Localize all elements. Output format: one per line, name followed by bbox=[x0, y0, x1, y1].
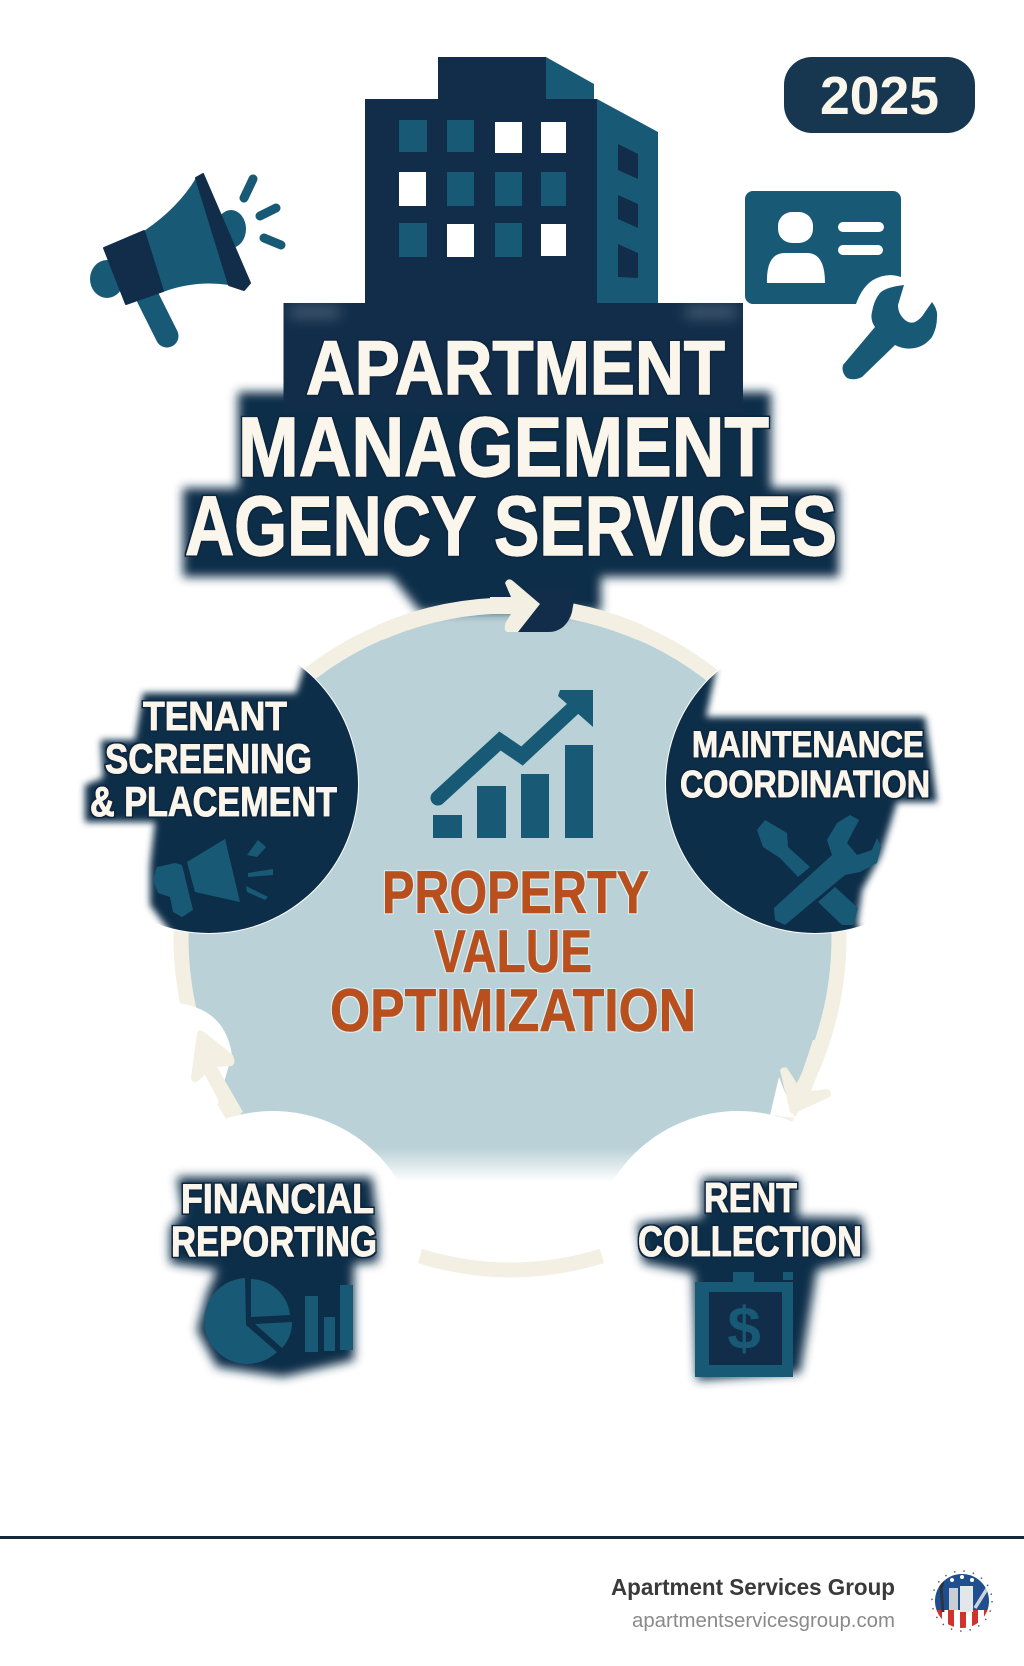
footer: company name: Apartment Services Group bbox=[611, 1574, 895, 1600]
icon: crossed tools bbox=[757, 815, 881, 925]
white blob behind left arrow bbox=[176, 1003, 232, 1120]
panel: financial reporting bbox=[126, 1111, 420, 1405]
financial label: REPORTING bbox=[171, 1218, 377, 1266]
icon: megaphone bbox=[90, 174, 281, 336]
icon: ID card with wrench bbox=[745, 191, 937, 379]
cycle ring bbox=[181, 606, 839, 1268]
rent label: COLLECTION bbox=[638, 1218, 862, 1266]
badge: year 2025: 2025 bbox=[820, 66, 939, 126]
chart: rising bars and arrow bbox=[433, 690, 593, 838]
footer divider bbox=[0, 1536, 1024, 1539]
icon: clipboard with dollar bbox=[695, 1272, 793, 1377]
financial label bbox=[171, 1175, 377, 1266]
panel: title banner bbox=[183, 303, 839, 612]
tenant label: & PLACEMENT bbox=[90, 778, 337, 825]
cycle ring: bottom segment bbox=[420, 1256, 602, 1270]
arrow: top of cycle bbox=[490, 579, 540, 632]
maintenance label: MAINTENANCE bbox=[692, 724, 924, 765]
financial label: FINANCIAL bbox=[181, 1175, 374, 1222]
panel: central value circle bbox=[181, 606, 839, 1268]
tenant label: SCREENING bbox=[105, 735, 312, 782]
title text: MANAGEMENT bbox=[238, 400, 769, 494]
heading: property value optimization bbox=[330, 859, 696, 1044]
heading: property value optimization: VALUE bbox=[434, 918, 592, 985]
tenant label: TENANT bbox=[143, 693, 287, 739]
icon: clipboard with dollar: $ bbox=[727, 1295, 761, 1362]
panel: maintenance coordination bbox=[665, 670, 942, 934]
heading: property value optimization: PROPERTY bbox=[382, 859, 649, 926]
icon: apartment building bbox=[365, 57, 658, 309]
title text bbox=[185, 326, 837, 573]
tenant label bbox=[90, 693, 337, 825]
arrow: left side of cycle bbox=[191, 1030, 243, 1120]
badge: year 2025 bbox=[784, 57, 975, 133]
panel: tenant screening and placement bbox=[79, 665, 359, 934]
icon: company logo bbox=[930, 1570, 994, 1634]
title text: APARTMENT bbox=[306, 326, 725, 411]
rent label: RENT bbox=[704, 1174, 797, 1221]
maintenance label bbox=[680, 724, 930, 806]
white fade at base of circle bbox=[340, 1148, 690, 1291]
rent label bbox=[638, 1174, 862, 1266]
title text: AGENCY SERVICES bbox=[185, 479, 837, 573]
wedge behind right arrow bbox=[770, 1077, 795, 1118]
icon: pie chart and bars bbox=[204, 1278, 353, 1364]
arrow: right side of cycle bbox=[780, 1040, 831, 1114]
icon: small megaphone bbox=[153, 839, 273, 917]
heading: property value optimization: OPTIMIZATION bbox=[330, 977, 696, 1044]
footer: website: apartmentservicesgroup.com bbox=[632, 1610, 895, 1632]
panel: rent collection bbox=[591, 1111, 885, 1405]
ring redraw over banner stem, with top arrow bbox=[380, 579, 640, 632]
maintenance label: COORDINATION bbox=[680, 764, 930, 806]
